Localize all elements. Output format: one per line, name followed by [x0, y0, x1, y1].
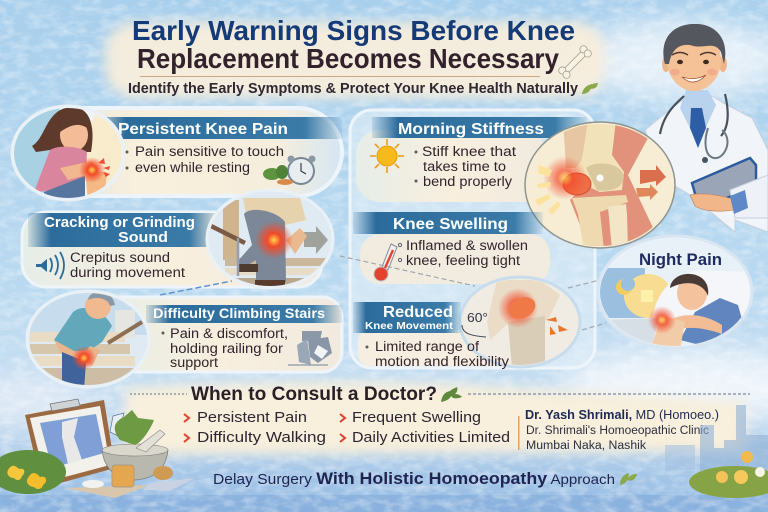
- bullets: holding railing for: [170, 341, 284, 356]
- text: [70, 250, 185, 280]
- header ribbon: [28, 213, 218, 247]
- subtitle: Identify the Early Symptoms & Protect Your Knee Health Naturally: [128, 81, 578, 97]
- header ribbon: Sound: [118, 229, 168, 246]
- bullets: reduced movement: motion and flexibility: [375, 354, 509, 369]
- header ribbon: Persistent Knee Pain: [118, 121, 288, 138]
- illustration: older man climbing stairs: [27, 290, 149, 390]
- dashed connector: [160, 281, 232, 295]
- dashed connectors: [340, 256, 606, 330]
- text: knee swelling: [398, 238, 528, 268]
- header ribbon: [96, 117, 342, 139]
- icon: knee brace: [288, 331, 332, 365]
- bullets: morning stiffness: Stiff knee that: [422, 144, 516, 159]
- doctor illustration: [645, 24, 768, 232]
- heading: reduced knee movement: Knee Movement: [365, 320, 454, 332]
- heading: when to consult: [130, 384, 750, 405]
- title: Replacement Becomes Necessary: [137, 43, 559, 74]
- heading: knee swelling: [353, 212, 543, 234]
- doctor contact details: Dr. Yash Shrimali, MD (Homoeo.): [525, 407, 719, 422]
- bullets: morning stiffness: bend properly: [423, 174, 512, 189]
- bullets: even while resting: [135, 160, 250, 175]
- list: warning reasons: Persistent Pain: [197, 409, 307, 426]
- heading: reduced knee movement: Reduced: [383, 304, 453, 321]
- panel: persistent knee pain: [10, 102, 342, 200]
- bullets: support: [170, 355, 218, 370]
- heading: when to consult: When to Consult a Doctor?: [191, 384, 437, 405]
- illustration: knee joint anatomy: [525, 120, 675, 250]
- illustration: night pain: Night Pain: [639, 250, 722, 269]
- illustration: woman holding knee: [10, 104, 126, 202]
- header ribbon: Cracking or Grinding: [44, 214, 195, 231]
- icon: thermometer: [374, 244, 397, 281]
- panel: when to consult a doctor cream band: [125, 382, 745, 455]
- icon: speaker: [36, 252, 64, 279]
- illustration: reduced movement knee: [460, 277, 580, 368]
- list: warning reasons: [184, 409, 510, 446]
- text: during movement: [70, 265, 185, 280]
- text: Crepitus sound: [70, 250, 170, 265]
- list: warning reasons: Difficulty Walking: [197, 429, 326, 446]
- heading: morning stiffness: [372, 117, 587, 138]
- panel: difficulty climbing stairs: [27, 290, 342, 390]
- doctor contact details: [518, 407, 719, 452]
- header cream glow: [105, 22, 605, 98]
- bullets: Pain sensitive to touch: [135, 144, 284, 159]
- illustration: night pain: [598, 236, 752, 350]
- text: knee swelling: Inflamed & swollen: [406, 238, 528, 253]
- angle label: [462, 310, 488, 337]
- text: knee swelling: knee, feeling tight: [406, 253, 520, 268]
- icon: alarm clock and herbs: [263, 156, 316, 185]
- bullets: [126, 144, 284, 175]
- title: Early Warning Signs Before Knee: [132, 15, 575, 46]
- title: [132, 15, 575, 74]
- heading: knee swelling: Knee Swelling: [393, 216, 508, 233]
- bullets: [162, 326, 288, 370]
- bullets: morning stiffness: [414, 144, 516, 189]
- heading: reduced knee movement: [353, 302, 461, 333]
- doctor contact details: Mumbai Naka, Nashik: [526, 440, 646, 452]
- heading: morning stiffness: Morning Stiffness: [398, 121, 544, 138]
- panel: right symptoms group: [350, 110, 595, 368]
- illustration: leg on stairs: [207, 190, 335, 288]
- closing tagline: Delay Surgery With Holistic Homoeopathy Approach: [213, 470, 615, 488]
- icon: bone: [557, 44, 593, 80]
- illustration: left flowers: [0, 450, 66, 494]
- bullets: reduced movement: Limited range of: [375, 339, 479, 354]
- bullets: morning stiffness: takes time to: [423, 159, 506, 174]
- panel: cracking or grinding sound: [22, 190, 335, 288]
- icon: sun: [370, 139, 404, 173]
- doctor contact details: Dr. Shrimali's Homoeopathic Clinic: [526, 425, 709, 437]
- bullets: Pain & discomfort,: [170, 326, 288, 341]
- illustration: clipboard, mortar and herbs: [25, 399, 195, 498]
- angle label: 60°: [467, 310, 488, 325]
- header ribbon: Difficulty Climbing Stairs: [153, 305, 325, 321]
- list: warning reasons: Frequent Swelling: [352, 409, 481, 426]
- bullets: reduced movement: [366, 339, 509, 369]
- illustration: right city and flowers: [665, 405, 768, 498]
- list: warning reasons: Daily Activities Limited: [352, 429, 510, 446]
